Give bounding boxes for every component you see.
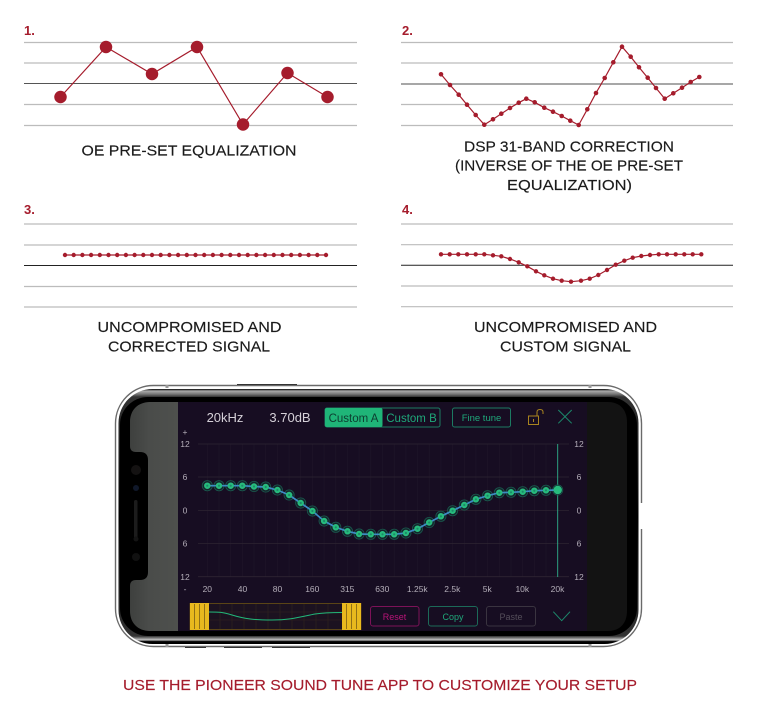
flat line with 31 points [65, 254, 326, 256]
axis labels: 160 [305, 584, 320, 594]
icon: open lock [528, 410, 543, 424]
app screen [178, 402, 587, 631]
step number 2: 2. [402, 23, 413, 38]
axis labels: 20 [203, 584, 212, 594]
line chart with seven points [60, 47, 328, 124]
axis labels: 12 [180, 572, 190, 582]
header readouts [207, 410, 311, 425]
caption [455, 138, 683, 194]
paste button [486, 606, 536, 626]
custom A and B toggle: Custom A [329, 413, 379, 425]
axis labels: 0 [183, 506, 188, 516]
line chart with 31 points [441, 47, 699, 125]
overview scrubber [190, 603, 361, 630]
axis labels: 20k [551, 584, 565, 594]
panel: chart 4 uncompromised and custom signal [401, 202, 733, 356]
step number 3: 3. [24, 202, 35, 217]
header readouts: 20kHz [207, 410, 243, 425]
copy button: Copy [442, 612, 464, 622]
reset button: Reset [383, 612, 407, 622]
icon: close [558, 410, 572, 423]
caption [474, 319, 657, 356]
curve with 31 points [441, 254, 701, 282]
axis labels: 5k [483, 584, 493, 594]
copy button [428, 606, 478, 626]
axis labels: 315 [340, 584, 355, 594]
axis labels: 6 [577, 472, 582, 482]
caption: UNCOMPROMISED AND [98, 319, 282, 336]
panel: chart 3 uncompromised and corrected signal [24, 202, 357, 356]
step number 4: 4. [402, 202, 413, 217]
panel: chart 2 DSP 31-band correction [401, 23, 733, 194]
caption: DSP 31-BAND CORRECTION [464, 138, 674, 156]
axis labels: 12 [574, 572, 584, 582]
custom A and B toggle [325, 408, 440, 427]
fine tune button: Fine tune [462, 413, 501, 424]
axis labels: 2.5k [444, 584, 461, 594]
axis labels: 10k [515, 584, 530, 594]
caption: EQUALIZATION) [507, 177, 632, 194]
axis labels: + [183, 427, 188, 437]
axis labels: 630 [375, 584, 390, 594]
caption: OE PRE-SET EQUALIZATION [82, 142, 296, 160]
EQ chart [180, 427, 584, 594]
caption: UNCOMPROMISED AND [474, 319, 657, 336]
caption: CORRECTED SIGNAL [108, 338, 270, 356]
axis labels: 12 [574, 439, 584, 449]
axis labels: 80 [273, 584, 282, 594]
EQ curve with 31 nodes [207, 486, 558, 534]
header readouts: 3.70dB [269, 410, 311, 425]
axis labels: 6 [577, 538, 582, 548]
caption: (INVERSE OF THE OE PRE-SET [455, 158, 683, 174]
caption: CUSTOM SIGNAL [500, 338, 631, 356]
axis labels: 1.25k [407, 584, 428, 594]
panel: chart 1 OE pre-set equalization [24, 23, 357, 160]
bottom caption: USE THE PIONEER SOUND TUNE APP TO CUSTOMIZE YOUR SETUP [123, 677, 637, 694]
paste button: Paste [499, 612, 523, 622]
phone with Sound Tune app [116, 384, 642, 648]
step number 1: 1. [24, 23, 35, 38]
phone body [116, 384, 642, 648]
reset button [370, 606, 419, 626]
axis labels: - [184, 584, 187, 594]
axis labels: 6 [183, 472, 188, 482]
caption [98, 319, 282, 356]
side display area with notch [130, 402, 627, 631]
custom A and B toggle: Custom B [386, 413, 437, 425]
axis labels: 12 [180, 439, 190, 449]
axis labels [180, 427, 584, 594]
axis labels: 40 [238, 584, 247, 594]
axis labels: 0 [577, 506, 582, 516]
fine tune button [452, 408, 510, 427]
icon: chevron down [553, 612, 570, 621]
axis labels: 6 [183, 538, 188, 548]
